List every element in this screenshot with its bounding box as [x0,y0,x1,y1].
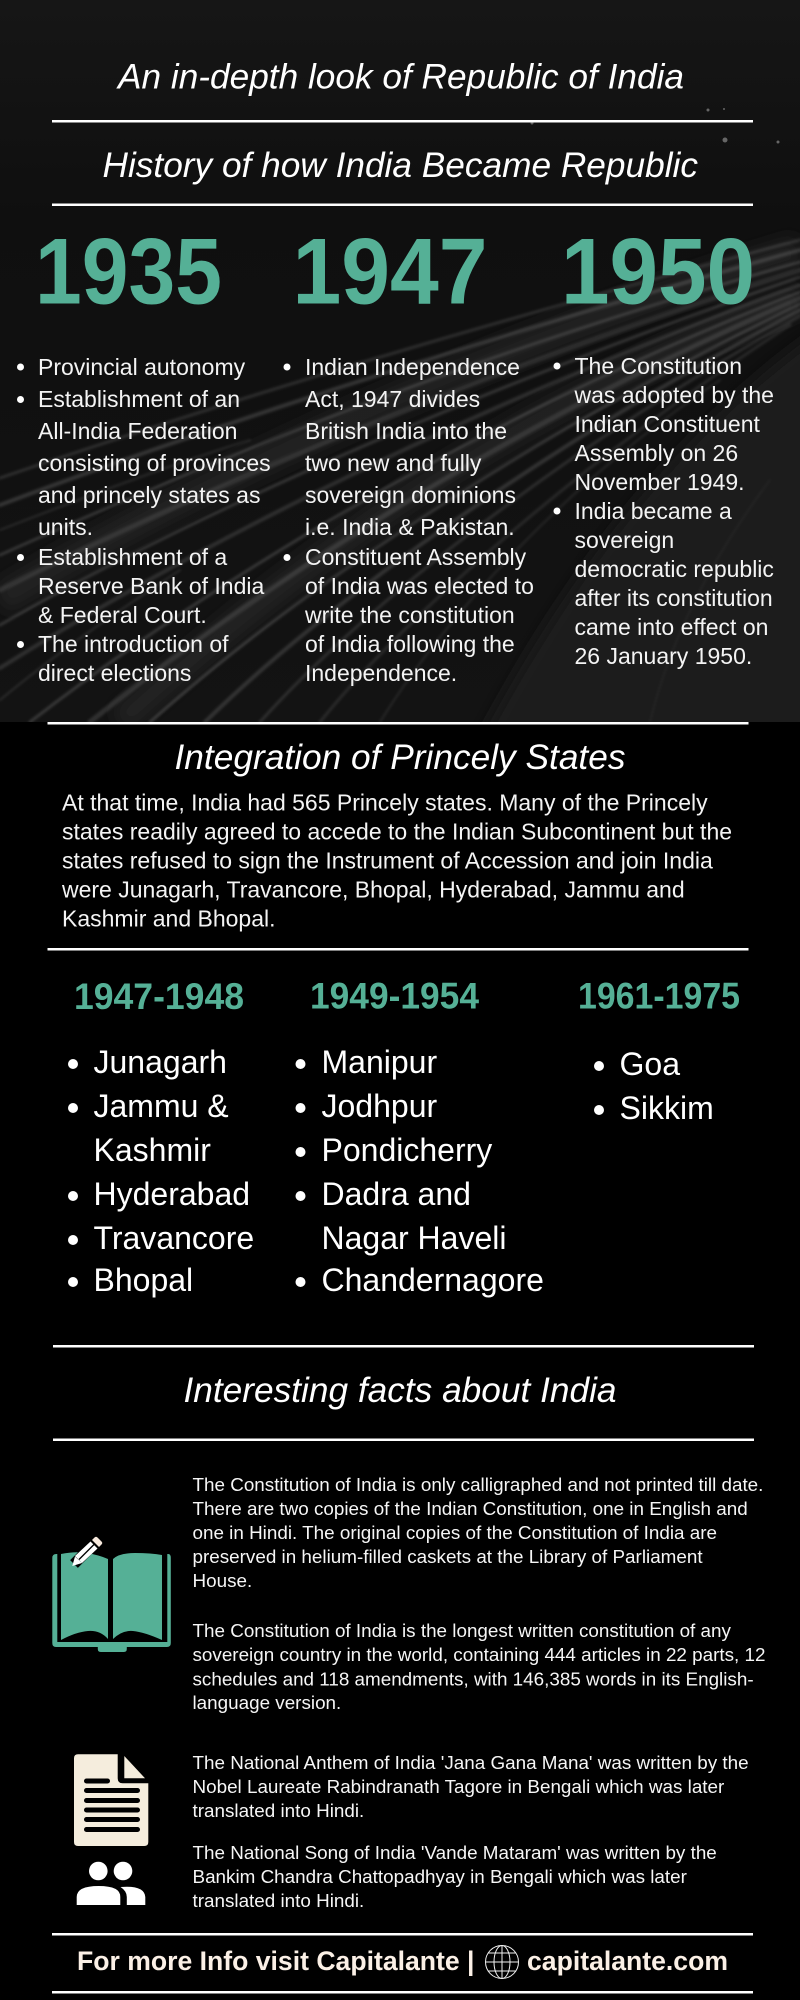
text block: 1935 list: Provincial autonomy [38,354,246,380]
list: 1961-1975 states: Sikkim [620,1090,714,1126]
text block: 1935 list: consisting of provinces [38,450,271,476]
text block: 1950 list: November 1949. [574,469,745,495]
year heading 1947: 1947 [292,218,488,324]
text block: 1947 list: Independence. [305,660,457,686]
text block: constitution calligraphed: preserved in helium-filled caskets at the Library of Parliament [192,1546,703,1567]
text block: 1950 list: The Constitution [574,353,742,379]
text block: 1935 list: The introduction of [38,631,229,657]
text block: integration paragraph [61,790,732,932]
text block: national song [192,1842,717,1911]
text block: national anthem: translated into Hindi. [192,1800,364,1821]
list: 1949-1954 states: Manipur [322,1044,437,1080]
list: 1949-1954 states [296,1044,544,1298]
icon: document [74,1754,148,1846]
footer [77,1946,728,1978]
list: 1947-1948 states: Travancore [94,1220,254,1256]
text block: 1947 list: two new and fully [305,450,482,476]
text block: 1947 list: sovereign dominions [305,482,516,508]
text block: 1935 list: Reserve Bank of India [38,573,265,599]
text block: 1950 list: was adopted by the [574,382,774,408]
list: 1949-1954 states: Dadra and [322,1176,471,1212]
list: 1961-1975 states: Goa [620,1046,680,1082]
panel: road photo background [0,0,800,740]
subheading 1949-1954: 1949-1954 [310,976,479,1016]
text block: 1950 list: came into effect on [574,614,768,640]
text block: 1947 list: of India was elected to [305,573,534,599]
text block: integration paragraph: were Junagarh, Travancore, Bhopal, Hyderabad, Jammu and [61,876,685,902]
text block: 1950 list: Assembly on 26 [574,440,738,466]
icon: people [77,1862,145,1905]
text block: 1947 list: of India following the [305,631,515,657]
list: 1947-1948 states: Kashmir [94,1132,211,1168]
list: 1947-1948 states: Bhopal [94,1262,193,1298]
text block: 1947 list: i.e. India & Pakistan. [305,514,515,540]
text block: 1935 list: direct elections [38,660,191,686]
text block: 1935 list: units. [38,514,93,540]
list: 1947-1948 states: Hyderabad [94,1176,250,1212]
list: 1947-1948 states [68,1044,254,1298]
list: 1949-1954 states: Chandernagore [322,1262,544,1298]
list: 1949-1954 states: Pondicherry [322,1132,492,1168]
text block: integration paragraph: Kashmir and Bhopal. [62,906,276,932]
heading: history: History of how India Became Republic [102,146,698,185]
text block: national anthem [192,1752,749,1821]
text block: constitution calligraphed: There are two copies of the Indian Constitution, one in English and [192,1498,748,1519]
text block: 1950 list: India became a [574,498,732,524]
text block: 1935 list: All-India Federation [38,418,237,444]
text block: 1950 list [554,353,774,669]
list: 1949-1954 states: Nagar Haveli [322,1220,506,1256]
text block: 1950 list: democratic republic [574,556,774,582]
title: An in-depth look of Republic of India [116,58,684,96]
subheading 1947-1948: 1947-1948 [74,976,244,1017]
text block: national anthem: The National Anthem of India 'Jana Gana Mana' was written by the [192,1752,749,1773]
text block: longest constitution: The Constitution of India is the longest written constitution of any [192,1620,731,1641]
text block: constitution calligraphed [192,1474,763,1591]
year heading 1935: 1935 [35,218,222,324]
footer: For more Info visit Capitalante | [77,1946,474,1976]
footer: capitalante.com [527,1946,728,1976]
text block: 1947 list: Indian Independence [305,354,520,380]
text block: longest constitution [192,1620,765,1713]
text block: 1947 list [284,354,534,686]
list: 1947-1948 states: Jammu & [94,1088,229,1124]
text block: national song: translated into Hindi. [192,1890,364,1911]
year heading 1950: 1950 [561,218,755,324]
text block: 1947 list: write the constitution [304,602,515,628]
text block: integration paragraph: states refused to sign the Instrument of Accession and join India [62,848,713,874]
text block: national song: Bankim Chandra Chattopadhyay in Bengali which was later [192,1866,687,1887]
text block: 1947 list: Constituent Assembly [305,544,527,570]
text block: 1950 list: sovereign [574,527,674,553]
heading: interesting facts: Interesting facts about India [184,1371,616,1410]
text block: 1950 list: 26 January 1950. [574,643,752,669]
text block: 1935 list [17,354,271,686]
text block: 1950 list: after its constitution [574,585,773,611]
text block: constitution calligraphed: House. [192,1570,252,1591]
list: 1949-1954 states: Jodhpur [322,1088,437,1124]
heading: integration of princely states: Integration of Princely States [174,738,626,777]
text block: constitution calligraphed: The Constitution of India is only calligraphed and not printed till date. [192,1474,763,1495]
text block: 1947 list: Act, 1947 divides [305,386,480,412]
text block: integration paragraph: states readily agreed to accede to the Indian Subcontinent but the [62,818,732,844]
text block: integration paragraph: At that time, India had 565 Princely states. Many of the Princely [62,790,708,816]
text block: longest constitution: schedules and 118 amendments, with 146,385 words in its English- [192,1668,754,1690]
icon: globe [486,1946,518,1978]
text block: longest constitution: language version. [192,1692,341,1713]
text block: 1950 list: Indian Constituent [574,411,761,437]
subheading 1961-1975: 1961-1975 [578,976,740,1016]
text block: longest constitution: sovereign country in the world, containing 444 articles in 22 parts, 12 [192,1644,765,1665]
icon: open book with pencil [52,1537,171,1652]
text block: 1935 list: Establishment of an [38,386,240,412]
text block: 1935 list: & Federal Court. [38,602,207,628]
text block: 1935 list: Establishment of a [38,544,227,570]
text block: 1947 list: British India into the [305,418,507,444]
text block: 1935 list: and princely states as [38,482,260,508]
list: 1961-1975 states [594,1046,714,1126]
text block: constitution calligraphed: one in Hindi. The original copies of the Constitution of India are [192,1522,717,1543]
text block: national anthem: Nobel Laureate Rabindranath Tagore in Bengali which was later [192,1776,724,1797]
list: 1947-1948 states: Junagarh [94,1044,227,1080]
text block: national song: The National Song of India 'Vande Mataram' was written by the [192,1842,717,1863]
